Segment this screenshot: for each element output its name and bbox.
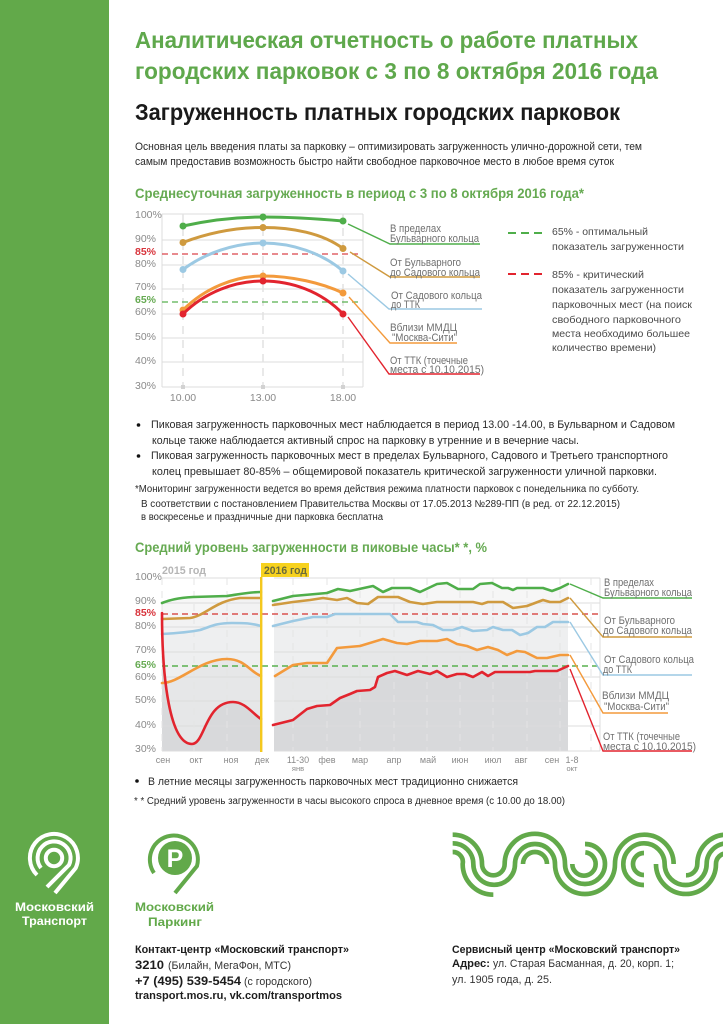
connectors and series labels: до ТТК [391,299,420,311]
connectors and series labels: места с 10.10.2015) [390,364,484,376]
text block: contact center: +7 (495) 539-5454 [135,974,241,988]
chart: average load in peak hours [135,563,696,773]
panel: green sidebar [0,0,109,1024]
text block: service center: ул. Старая Басманная, д. 20, корп. 1; [493,958,674,970]
y axis labels: 50% [135,694,156,706]
area fills 2016 [273,583,568,751]
connectors and series labels: В пределах [390,223,441,235]
y axis labels: 80% [135,258,156,270]
x axis labels: фев [318,755,336,765]
title [135,27,658,84]
series: from TTK [162,613,568,744]
connectors and series labels: В пределах [604,577,654,589]
text block: contact center: (с городского) [244,976,312,988]
x axis labels: 1-8 [565,755,579,765]
x axis labels: авг [514,755,528,765]
series: from TTK [180,278,346,317]
x axis labels: сен [156,755,170,765]
x axis labels: апр [387,755,401,765]
logo: Moscow Transport: Московский [15,902,94,914]
x axis labels [156,755,579,773]
legend: 65 percent: 65% - оптимальный [552,226,648,238]
y axis labels: 60% [135,306,156,318]
legend: 85 percent: количество времени) [552,342,656,354]
heading: daily average chart: Среднесуточная загруженность в период с 3 по 8 октября 2016 года* [135,185,585,201]
connectors and series labels: Вблизи ММДЦ [602,690,669,702]
x axis labels: сен [545,755,559,765]
connectors and series labels [570,577,696,753]
y axis labels: 50% [135,331,156,343]
x axis labels: июн [452,755,468,765]
y axis labels: 40% [135,719,156,731]
y axis labels: 85% [135,246,157,258]
series: Moscow City [180,273,346,313]
x axis labels [170,392,356,404]
connectors and series labels: От Бульварного [604,615,675,627]
connectors and series labels: От Садового кольца [391,290,483,302]
connectors and series labels: места с 10.10.2015) [603,741,696,753]
connectors and series labels: Бульварного кольца [604,587,693,599]
text block: summer bullet: В летние месяцы загруженность парковочных мест традиционно снижается [148,776,518,788]
y axis labels: 40% [135,355,156,367]
connectors and series labels: Бульварного кольца [390,233,480,245]
connectors and series labels: до Садового кольца [603,625,693,637]
connectors and series labels: "Москва-Сити" [392,332,457,344]
x axis labels: 11-30 [287,755,309,765]
footnote: peak hours: * * Средний уровень загруженности в часы высокого спроса в дневное время (с 10.00 до 18.00) [134,796,565,807]
text block: service center: Сервисный центр «Московский транспорт» [452,944,680,956]
legend: 85 percent: парковочных мест (на поиск [552,299,692,311]
text block: bullets on peak load: Пиковая загруженность парковочных мест наблюдается в период 13.00 -14.00, в Бульварном и Садовом [151,419,675,431]
label: 2015: 2015 год [162,565,206,577]
chart: daily average load [135,209,484,404]
connectors and series labels: Вблизи ММДЦ [390,322,457,334]
text block: service center: ул. 1905 года, д. 25. [452,974,552,986]
x axis labels: янв [292,764,304,773]
connectors and series labels: От ТТК (точечные [390,355,468,367]
x axis labels: 10.00 [170,392,196,404]
text block: service center: Адрес: [452,958,490,970]
y axis labels: 80% [135,620,156,632]
legend: 65 percent [508,226,684,253]
footnote: monitoring [135,483,639,523]
logo: Moscow Parking: Паркинг [148,917,202,929]
footnote: monitoring: в воскресенье и праздничные дни парковка бесплатна [141,511,383,523]
heading: parking load: Загруженность платных городских парковок [135,99,620,125]
footnote: monitoring: *Мониторинг загруженности ведется во время действия режима платности парковок с понедельника по субботу. [135,483,639,495]
legend: 85 percent: места необходимо большее [552,328,690,340]
text block: contact center: 3210 [135,958,164,972]
divider: 2016 boundary [260,577,262,752]
text block: introduction: самым предоставив возможность быстро найти свободное парковочное место в любое время суток [135,156,614,168]
y axis labels: 30% [135,380,156,392]
y axis labels: 100% [135,209,162,221]
y axis labels: 70% [135,281,156,293]
x axis labels: май [420,755,436,765]
series: Boulevard to Garden ring [162,597,568,619]
legend: 85 percent [508,269,692,354]
text block: contact center: (Билайн, МегаФон, МТС) [168,960,291,972]
x axis labels: мар [352,755,368,765]
y axis labels: 30% [135,743,156,755]
connectors and series labels: От ТТК (точечные [603,731,680,743]
series: Moscow City [162,639,568,683]
x axis labels: 13.00 [250,392,276,404]
y axis labels: 65% [135,294,157,306]
x axis labels: июл [485,755,501,765]
gap between years [262,570,274,753]
y axis labels [135,571,162,755]
footnote: monitoring: В соответствии с постановлением Правительства Москвы от 17.05.2013 №289-ПП (в ред. от 22.12.2015) [141,499,620,510]
x axis labels: 18.00 [330,392,356,404]
y axis labels: 100% [135,571,162,583]
logo: Moscow Transport: Транспорт [22,916,87,928]
text block: bullets on peak load [137,419,675,478]
connectors and series labels: "Москва-Сити" [604,701,669,713]
label: 2016: 2016 год [264,565,307,577]
x axis labels: ноя [224,755,239,765]
text block: bullets on peak load: кольце также наблюдается активный спрос на парковку в утренние и в вечерние часы. [152,435,579,447]
series: Garden ring to TTK [162,614,568,635]
text block: contact center: transport.mos.ru, vk.com/transportmos [135,990,342,1002]
legend: 85 percent: свободного парковочного [552,314,681,326]
y axis labels: 65% [135,659,157,671]
legend: 85 percent: 85% - критический [552,269,644,281]
series: Boulevard ring [162,583,568,603]
text block: bullets on peak load: Пиковая загруженность парковочных мест в пределах Бульварного, Садового и Третьего транспортного [151,450,668,462]
text block: contact center: Контакт-центр «Московский транспорт» [135,944,349,956]
text block: introduction [135,141,642,168]
y axis labels: 90% [135,595,156,607]
text block: bullets on peak load: колец превышает 80-85% – общемировой показатель критической загруженности уличной парковки. [152,466,657,478]
y axis labels: 90% [135,233,156,245]
x axis labels: окт [189,755,203,765]
logo: Moscow Parking: P [167,845,183,873]
connectors and series labels: От Бульварного [390,257,461,269]
logo: Moscow Parking: Московский [135,902,214,914]
title: городских парковок с 3 по 8 октября 2016 года [135,58,658,84]
text block: contact center [135,944,349,1002]
x axis labels: дек [255,755,269,765]
series: Boulevard to Garden ring [180,224,346,252]
area fills 2015 [162,592,261,751]
legend: 65 percent: показатель загруженности [552,241,684,253]
ornament: wave pattern [453,834,723,895]
connectors and series labels [348,223,484,376]
series: Boulevard ring [180,214,346,229]
connectors and series labels: до ТТК [603,664,632,676]
series: Garden ring to TTK [180,240,346,274]
text block: introduction: Основная цель введения платы за парковку – оптимизировать загруженность улично-дорожной сети, тем [135,141,642,153]
heading: peak hours chart: Средний уровень загруженности в пиковые часы* *, % [135,539,488,555]
connectors and series labels: до Садового кольца [390,267,481,279]
text block: service center [452,944,680,986]
logo: Moscow Transport [15,834,94,928]
y axis labels [135,209,162,392]
title: Аналитическая отчетность о работе платных [135,27,638,53]
connectors and series labels: От Садового кольца [604,654,695,666]
y axis labels: 60% [135,671,156,683]
legend: 85 percent: показатель загруженности [552,284,684,296]
y axis labels: 70% [135,644,156,656]
x axis labels: окт [567,764,578,773]
y axis labels: 85% [135,607,157,619]
logo: Moscow Parking [135,836,214,929]
